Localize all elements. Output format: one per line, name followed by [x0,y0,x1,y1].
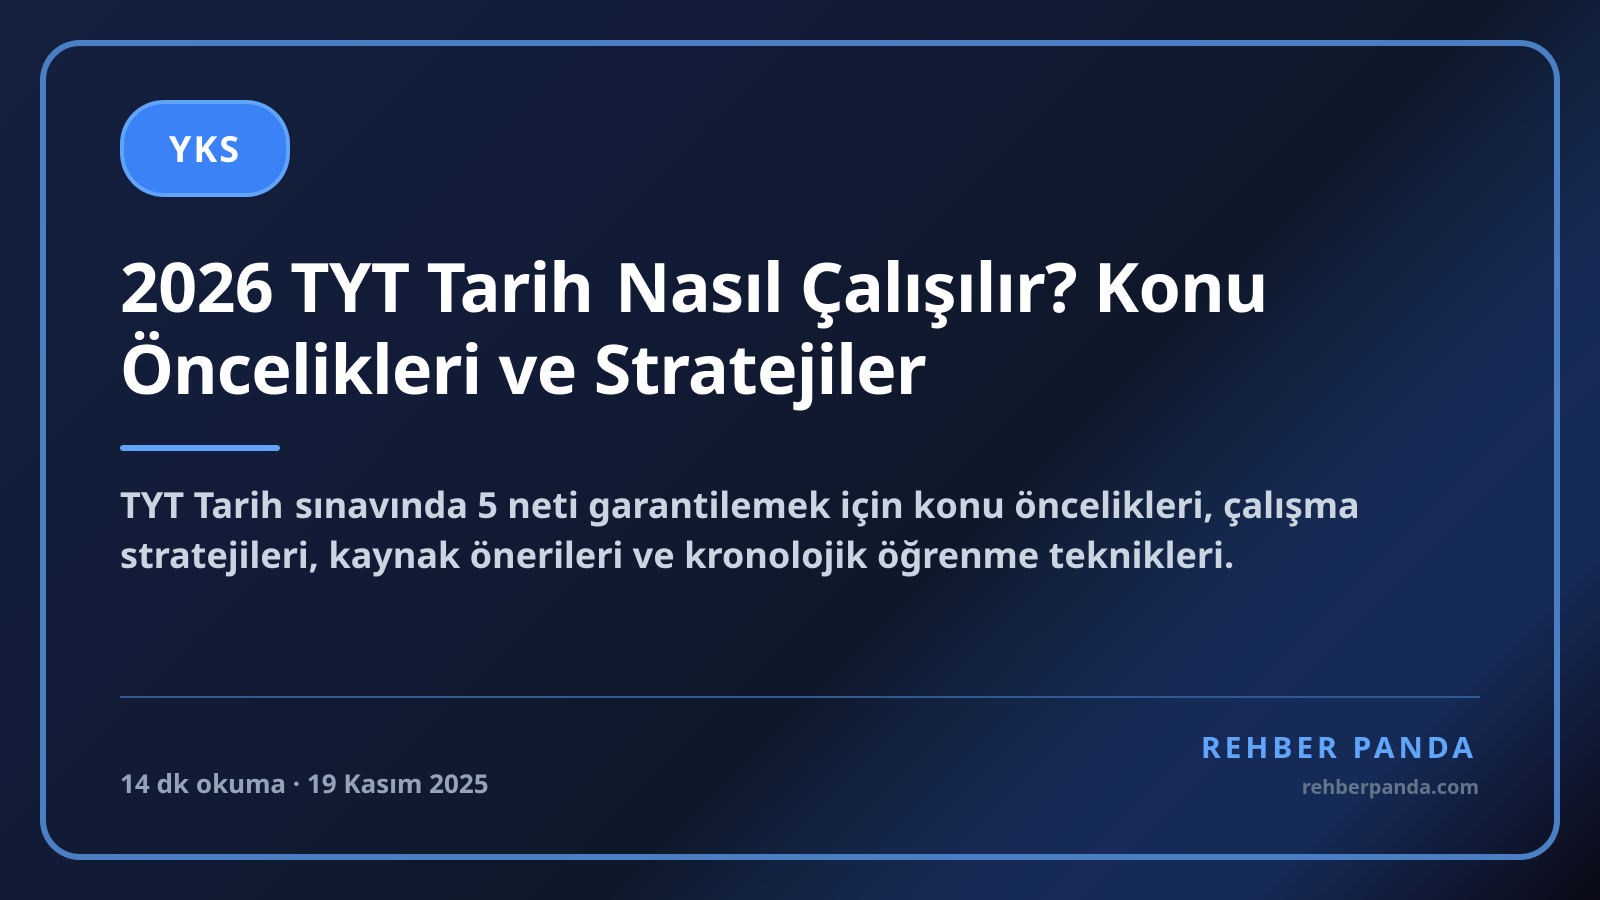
accent bar [120,445,280,451]
title [120,239,1268,414]
category badge [120,100,290,197]
description [120,480,1360,579]
category badge: YKS [169,124,241,173]
website: rehberpanda.com [1302,773,1479,800]
title: 2026 TYT Tarih Nasıl Çalışılır? Konu [120,239,1268,332]
description: TYT Tarih sınavında 5 neti garantilemek için konu öncelikleri, çalışma [120,480,1360,529]
description: stratejileri, kaynak önerileri ve kronolojik öğrenme teknikleri. [120,530,1234,579]
brand name: REHBER PANDA [1201,726,1477,767]
footer divider [120,696,1480,698]
reading time and date: 14 dk okuma · 19 Kasım 2025 [120,765,489,801]
title: Öncelikleri ve Stratejiler [120,321,926,414]
